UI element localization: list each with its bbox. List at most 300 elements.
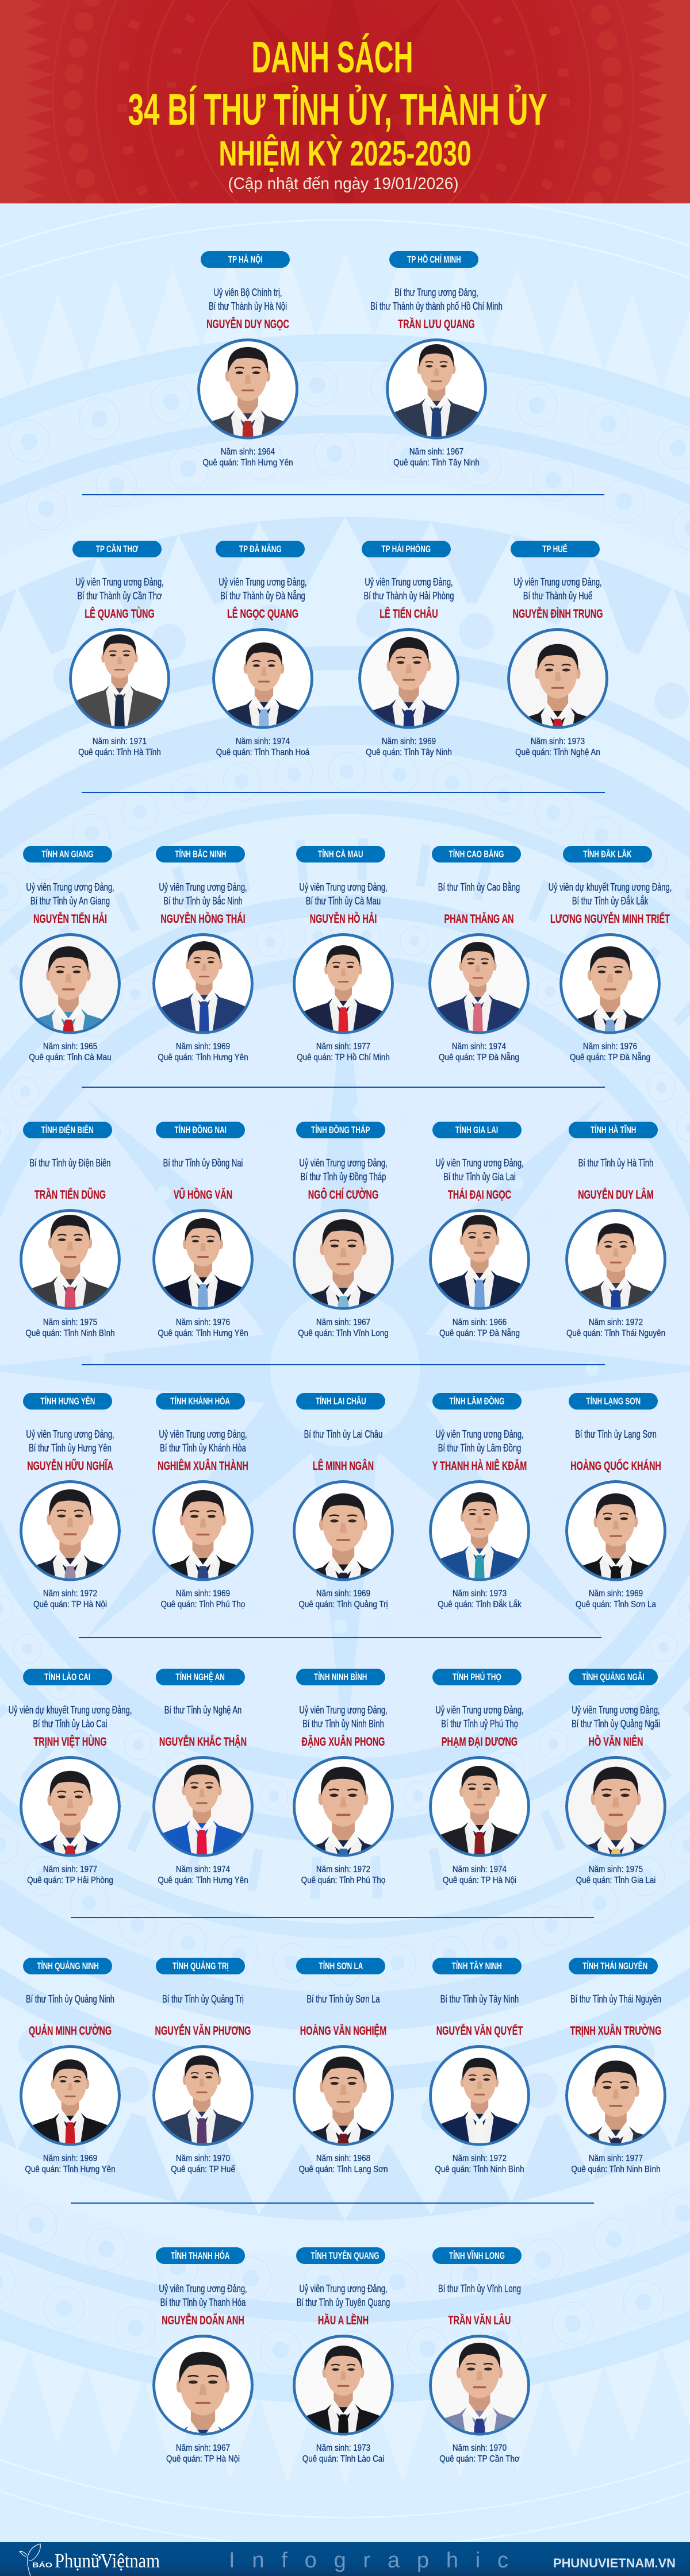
card: Tỉnh Lào Cai (7, 1669, 133, 1893)
province pill: TP HẢI PHÒNG (382, 544, 431, 555)
birth and hometown: Năm sinh: 1965 (43, 1042, 97, 1052)
province pill: TỈNH NGHỆ AN (176, 1672, 225, 1682)
portrait (152, 1756, 254, 1857)
card: Tỉnh Ninh Bình (280, 1669, 407, 1893)
role: Bí thư Tỉnh ủy Quảng Trị (162, 1993, 244, 2005)
province pill (569, 1122, 658, 1138)
role: Uỷ viên Trung ương Đảng, (26, 1428, 114, 1440)
role (364, 576, 454, 602)
province pill (23, 846, 112, 862)
logo wordmark: PhụnữViệtnam (55, 2550, 160, 2572)
name: NGHIÊM XUÂN THÀNH (158, 1460, 248, 1473)
birth and hometown: Năm sinh: 1971 (93, 737, 147, 746)
card: Tỉnh Thái Nguyên (553, 1958, 679, 2182)
portrait (386, 338, 487, 439)
province pill: TỈNH ĐỒNG THÁP (311, 1125, 370, 1135)
province pill: TỈNH LÀO CAI (45, 1672, 90, 1682)
name: ĐẶNG XUÂN PHONG (302, 1735, 385, 1749)
province pill: TỈNH LẠNG SƠN (586, 1396, 641, 1407)
province pill (362, 541, 451, 557)
birth and hometown: Năm sinh: 1974 (236, 737, 290, 746)
card: Tỉnh Đắk Lắk (549, 846, 672, 1062)
portrait (429, 1209, 530, 1310)
portrait (559, 933, 661, 1034)
birth and hometown (576, 1864, 656, 1886)
role (75, 576, 164, 602)
birth and hometown: Quê quán: Tỉnh Thanh Hoá (216, 748, 309, 757)
icon: logo flower (20, 2544, 40, 2576)
card: Tỉnh Tuyên Quang (280, 2247, 407, 2471)
name: HẦU A LỀNH (318, 2314, 369, 2327)
birth and hometown (515, 737, 600, 757)
portrait (565, 1209, 666, 1310)
portrait (152, 2334, 254, 2435)
birth and hometown (297, 1042, 390, 1062)
name: HOÀNG VĂN NGHIỆM (300, 2024, 386, 2038)
province pill (201, 251, 290, 268)
portrait (428, 933, 530, 1034)
birth and hometown: Quê quán: Tỉnh Hưng Yên (202, 458, 293, 468)
birth and hometown: Quê quán: Tỉnh Gia Lai (576, 1876, 656, 1885)
province pill: TỈNH PHÚ THỌ (453, 1672, 501, 1682)
role: Uỷ viên Trung ương Đảng, (26, 881, 114, 893)
birth and hometown: Năm sinh: 1968 (316, 2154, 370, 2163)
website: PHUNUVIETNAM.VN (553, 2556, 676, 2570)
birth and hometown: Năm sinh: 1969 (589, 1589, 643, 1599)
birth and hometown: Năm sinh: 1975 (43, 1318, 97, 1327)
name: Y THANH HÀ NIÊ KĐĂM (432, 1460, 527, 1473)
portrait (152, 1480, 254, 1581)
portrait (197, 338, 298, 439)
province pill: TỈNH AN GIANG (41, 849, 94, 860)
card: Tỉnh Lâm Đồng (416, 1393, 543, 1617)
role (9, 1703, 132, 1731)
birth and hometown: Năm sinh: 1972 (43, 1589, 97, 1599)
role (299, 1703, 388, 1731)
province pill (432, 846, 521, 862)
role: Bí thư Tỉnh ủy An Giang (30, 895, 110, 907)
card: Tỉnh Bắc Ninh (152, 846, 254, 1062)
role: Bí thư Tỉnh ủy Quảng Ninh (26, 1993, 114, 2005)
province pill: TP HỒ CHÍ MINH (407, 254, 461, 265)
role: Bí thư Tỉnh ủy Hà Tĩnh (578, 1157, 653, 1169)
card: TP Cần Thơ (69, 541, 170, 757)
birth and hometown: Năm sinh: 1973 (453, 1589, 507, 1599)
birth and hometown (25, 1317, 115, 1339)
birth and hometown: Năm sinh: 1970 (453, 2443, 507, 2453)
province pill: TỈNH QUẢNG NGÃI (582, 1672, 645, 1682)
title: DANH SÁCH (252, 32, 413, 82)
portrait (20, 1209, 121, 1310)
role: Bí thư Tỉnh ủy Đắk Lắk (572, 895, 648, 907)
province pill: TỈNH CÀ MAU (318, 849, 363, 860)
birth and hometown: Năm sinh: 1973 (531, 737, 585, 746)
card: Tỉnh An Giang (20, 846, 121, 1062)
card: Tỉnh Vĩnh Long (416, 2247, 543, 2471)
province pill: TỈNH THÁI NGUYÊN (582, 1961, 647, 1972)
province pill: TỈNH THANH HÓA (171, 2250, 230, 2261)
logo wordmark: BÁO (32, 2560, 52, 2569)
card: TP Hải Phòng (358, 541, 459, 757)
birth and hometown: Năm sinh: 1974 (452, 1042, 506, 1052)
name: NGUYỄN TIẾN HẢI (33, 912, 107, 926)
role (159, 1427, 247, 1455)
birth and hometown: Năm sinh: 1974 (453, 1865, 507, 1874)
role: Bí thư Tỉnh ủy Nghệ An (164, 1704, 241, 1716)
province pill (432, 1393, 522, 1410)
birth and hometown: Năm sinh: 1972 (453, 2154, 507, 2163)
province pill: TỈNH VĨNH LONG (449, 2250, 505, 2261)
province pill (389, 251, 478, 268)
province pill (563, 846, 652, 862)
role: Bí thư Tỉnh uỷ Phú Thọ (441, 1718, 518, 1730)
card: Tỉnh Nghệ An (140, 1669, 266, 1893)
province pill (216, 541, 305, 557)
birth and hometown (298, 1588, 388, 1610)
title: (Cập nhật đến ngày 19/01/2026) (228, 175, 459, 193)
role: Bí thư Tỉnh ủy Tây Ninh (440, 1993, 519, 2005)
role (513, 576, 602, 602)
province pill (511, 541, 600, 557)
birth and hometown: Quê quán: TP Hải Phòng (27, 1876, 113, 1885)
card: Tỉnh Lai Châu (280, 1393, 407, 1617)
portrait (429, 2334, 530, 2435)
name: VŨ HỒNG VĂN (174, 1188, 232, 1202)
province pill: TP CẦN THƠ (96, 544, 138, 555)
birth and hometown (571, 2153, 661, 2175)
birth and hometown: Quê quán: Tỉnh Hưng Yên (158, 1053, 248, 1062)
role: Uỷ viên Trung ương Đảng, (218, 576, 307, 588)
role: Bí thư Tỉnh ủy Cà Mau (306, 895, 381, 907)
role: Bí thư Tỉnh ủy Lạng Sơn (575, 1428, 657, 1440)
role: Bí thư Tỉnh ủy Lâm Đồng (438, 1442, 521, 1454)
role: Uỷ viên Trung ương Đảng, (299, 881, 388, 893)
role: Uỷ viên Trung ương Đảng, (159, 2283, 247, 2294)
birth and hometown: Năm sinh: 1969 (176, 1042, 230, 1052)
birth and hometown: Năm sinh: 1974 (176, 1865, 230, 1874)
birth and hometown: Năm sinh: 1967 (409, 447, 463, 457)
province pill (432, 1669, 522, 1685)
portrait (293, 1756, 394, 1857)
role: Bí thư Tỉnh ủy Gia Lai (443, 1171, 516, 1183)
birth and hometown (302, 2443, 384, 2465)
card: TP Đà Nẵng (212, 541, 313, 757)
birth and hometown (301, 1864, 385, 1886)
role: Uỷ viên Trung ương Đảng, (365, 576, 453, 588)
birth and hometown: Quê quán: TP Đà Nẵng (439, 1053, 519, 1062)
role (26, 881, 114, 907)
name: LÊ QUANG TÙNG (85, 607, 155, 621)
birth and hometown: Quê quán: Tỉnh Hưng Yên (158, 1876, 248, 1885)
portrait (152, 2044, 254, 2146)
card: Tỉnh Tây Ninh (416, 1958, 543, 2182)
birth and hometown: Năm sinh: 1977 (43, 1865, 97, 1874)
birth and hometown (158, 1317, 248, 1339)
role: Uỷ viên Trung ương Đảng, (75, 576, 164, 588)
birth and hometown (33, 1588, 107, 1610)
birth and hometown (202, 447, 293, 468)
birth and hometown: Năm sinh: 1973 (316, 2443, 370, 2453)
birth and hometown: Quê quán: Tỉnh Ninh Bình (25, 1329, 115, 1338)
role: Uỷ viên dự khuyết Trung ương Đảng, (549, 881, 672, 893)
province pill: TỈNH ĐỒNG NAI (174, 1125, 227, 1135)
birth and hometown: Quê quán: Tỉnh Hưng Yên (158, 1329, 248, 1338)
province pill: TỈNH ĐẮK LẮK (583, 849, 632, 860)
birth and hometown: Năm sinh: 1969 (316, 1589, 370, 1599)
role (370, 287, 503, 313)
role: Bí thư Tỉnh ủy Đồng Tháp (301, 1171, 386, 1183)
name: NGUYỄN ĐÌNH TRUNG (513, 607, 603, 621)
portrait (20, 1480, 121, 1581)
birth and hometown (158, 1042, 248, 1062)
birth and hometown: Năm sinh: 1967 (316, 1318, 370, 1327)
portrait (293, 1480, 394, 1581)
portrait (293, 1209, 394, 1310)
role (299, 881, 388, 907)
role: Uỷ viên Trung ương Đảng, (435, 1157, 524, 1169)
role: Uỷ viên Trung ương Đảng, (299, 1704, 388, 1716)
province pill (296, 1122, 385, 1138)
role: Uỷ viên Trung ương Đảng, (513, 576, 602, 588)
card: Tỉnh Điện Biên (20, 1122, 121, 1338)
birth and hometown (393, 447, 480, 468)
birth and hometown: Quê quán: Tỉnh Ninh Bình (435, 2165, 524, 2174)
birth and hometown: Năm sinh: 1964 (221, 447, 275, 457)
card: Tỉnh Quảng Ngãi (553, 1669, 679, 1893)
infographic label: Infographic (229, 2548, 508, 2573)
portrait (293, 2334, 394, 2435)
role: Bí thư Trung ương Đảng, (394, 287, 478, 298)
role: Bí thư Tỉnh ủy Cao Bằng (438, 881, 520, 893)
role (435, 1703, 524, 1731)
birth and hometown: Năm sinh: 1976 (176, 1318, 230, 1327)
card: Tỉnh Đồng Tháp (280, 1122, 407, 1346)
name: NGUYỄN VĂN QUYẾT (436, 2024, 523, 2038)
portrait (152, 1209, 254, 1310)
role: Bí thư Tỉnh ủy Hưng Yên (29, 1442, 112, 1454)
birth and hometown (78, 737, 161, 757)
birth and hometown (570, 1041, 650, 1063)
birth and hometown (298, 1317, 389, 1339)
name: TRẦN TIẾN DŨNG (34, 1188, 106, 1202)
role: Bí thư Tỉnh ủy Ninh Bình (302, 1718, 384, 1730)
name: NGUYỄN DUY LÂM (578, 1188, 654, 1202)
portrait (20, 933, 121, 1034)
birth and hometown: Năm sinh: 1976 (583, 1042, 637, 1052)
province pill (23, 1122, 112, 1138)
birth and hometown: Quê quán: Tỉnh Thái Nguyên (566, 1329, 665, 1338)
birth and hometown (443, 1864, 516, 1886)
province pill: TỈNH TUYÊN QUANG (310, 2250, 379, 2261)
name: TRỊNH VIỆT HÙNG (33, 1735, 107, 1749)
birth and hometown: Quê quán: TP Cần Thơ (439, 2454, 520, 2464)
birth and hometown: Năm sinh: 1969 (382, 737, 436, 746)
card: TP Huế (507, 541, 608, 757)
birth and hometown (438, 1588, 522, 1610)
card: Tỉnh Hà Tĩnh (553, 1122, 679, 1346)
birth and hometown (216, 737, 309, 757)
province pill (296, 846, 385, 862)
birth and hometown (158, 1864, 248, 1886)
name: HOÀNG QUỐC KHÁNH (570, 1460, 661, 1473)
birth and hometown (439, 1317, 520, 1339)
portrait (565, 1480, 666, 1581)
card: TP Hồ Chí Minh (370, 251, 503, 468)
province pill: TỈNH KHÁNH HÒA (171, 1396, 230, 1407)
portrait (565, 1756, 666, 1857)
portrait (20, 2044, 121, 2146)
province pill (296, 2247, 385, 2264)
birth and hometown: Năm sinh: 1970 (176, 2154, 230, 2163)
province pill: TỈNH HÀ TĨNH (591, 1125, 636, 1135)
role: Uỷ viên Trung ương Đảng, (159, 1428, 247, 1440)
birth and hometown: Năm sinh: 1969 (43, 2154, 97, 2163)
role: Bí thư Tỉnh ủy Sơn La (306, 1993, 380, 2005)
birth and hometown: Quê quán: Tỉnh Tây Ninh (393, 458, 480, 468)
portrait (429, 1480, 530, 1581)
role (209, 287, 287, 313)
role (159, 881, 247, 907)
role (26, 1427, 114, 1455)
birth and hometown: Quê quán: Tỉnh Nghệ An (515, 748, 600, 757)
portrait (507, 628, 608, 729)
card: Tỉnh Cao Bằng (428, 846, 530, 1062)
province pill (432, 1958, 522, 1974)
name: HỒ VĂN NIÊN (588, 1735, 643, 1749)
card: Tỉnh Sơn La (280, 1958, 407, 2182)
name: NGUYỄN HỮU NGHĨA (27, 1460, 113, 1473)
role: Bí thư Thành ủy Huế (523, 590, 592, 602)
portrait (565, 2044, 666, 2146)
card: TP Hà Nội (197, 251, 298, 468)
birth and hometown: Năm sinh: 1972 (316, 1865, 370, 1874)
name: TRẦN LƯU QUANG (398, 318, 475, 331)
birth and hometown: Năm sinh: 1966 (453, 1318, 507, 1327)
province pill (432, 2247, 522, 2264)
birth and hometown (29, 1042, 112, 1062)
province pill: TP ĐÀ NẴNG (239, 544, 281, 555)
province pill (296, 1958, 385, 1974)
role: Uỷ viên dự khuyết Trung ương Đảng, (9, 1704, 132, 1716)
birth and hometown: Quê quán: Tỉnh Hà Tĩnh (78, 748, 161, 757)
province pill (156, 2247, 245, 2264)
province pill: TP HÀ NỘI (228, 254, 262, 265)
birth and hometown (576, 1588, 656, 1610)
birth and hometown: Quê quán: Tỉnh Quảng Trị (298, 1600, 388, 1609)
province pill (23, 1393, 112, 1410)
card: Tỉnh Gia Lai (416, 1122, 543, 1346)
card: Tỉnh Quảng Ninh (7, 1958, 133, 2182)
province pill (72, 541, 162, 557)
province pill (296, 1669, 385, 1685)
birth and hometown: Quê quán: Tỉnh Phú Thọ (301, 1876, 385, 1885)
birth and hometown: Quê quán: Tỉnh Phú Thọ (161, 1600, 245, 1609)
birth and hometown (166, 2443, 240, 2465)
birth and hometown (435, 2153, 524, 2175)
title: NHIỆM KỲ 2025-2030 (218, 134, 471, 173)
birth and hometown: Năm sinh: 1967 (176, 2443, 230, 2453)
name: THÁI ĐẠI NGỌC (448, 1188, 511, 1202)
role: Bí thư Tỉnh ủy Vĩnh Long (438, 2283, 521, 2294)
role (435, 1156, 524, 1184)
portrait (429, 1756, 530, 1857)
province pill: TỈNH TÂY NINH (452, 1961, 502, 1972)
role: Bí thư Tỉnh ủy Bắc Ninh (163, 895, 243, 907)
role: Bí thư Tỉnh ủy Lào Cai (33, 1718, 108, 1730)
province pill (23, 1958, 112, 1974)
name: QUẢN MINH CƯỜNG (29, 2024, 112, 2038)
birth and hometown (439, 1042, 519, 1062)
birth and hometown (27, 1864, 113, 1886)
province pill (156, 1122, 245, 1138)
name: PHẠM ĐẠI DƯƠNG (442, 1735, 518, 1749)
province pill (569, 1669, 658, 1685)
role (159, 2282, 247, 2309)
role: Uỷ viên Trung ương Đảng, (572, 1704, 660, 1716)
portrait (20, 1756, 121, 1857)
birth and hometown: Năm sinh: 1977 (316, 1042, 370, 1052)
birth and hometown: Quê quán: Tỉnh Vĩnh Long (298, 1329, 389, 1338)
card: Tỉnh Đồng Nai (140, 1122, 266, 1346)
province pill: TỈNH ĐIỆN BIÊN (41, 1125, 94, 1135)
role: Bí thư Thành ủy Đà Nẵng (220, 590, 305, 602)
card: Tỉnh Lạng Sơn (553, 1393, 679, 1617)
province pill: TỈNH LÂM ĐỒNG (450, 1396, 504, 1407)
birth and hometown: Quê quán: Tỉnh Lào Cai (302, 2454, 384, 2464)
birth and hometown: Quê quán: Tỉnh Ninh Bình (571, 2165, 661, 2174)
card: Tỉnh Hưng Yên (7, 1393, 133, 1617)
birth and hometown: Quê quán: TP Hà Nội (443, 1876, 516, 1885)
birth and hometown: Quê quán: Tỉnh Tây Ninh (366, 748, 452, 757)
portrait (429, 2044, 530, 2146)
name: NGUYỄN DOÃN ANH (162, 2314, 244, 2327)
province pill: TỈNH QUẢNG NINH (37, 1961, 98, 1972)
province pill: TỈNH CAO BẰNG (449, 849, 504, 860)
province pill (432, 1122, 522, 1138)
card: Tỉnh Cà Mau (293, 846, 394, 1062)
name: LÊ NGỌC QUANG (227, 607, 298, 621)
name: TRỊNH XUÂN TRƯỜNG (570, 2024, 661, 2038)
birth and hometown: Quê quán: Tỉnh Hưng Yên (25, 2165, 116, 2174)
role (299, 1156, 388, 1184)
card: Tỉnh Khánh Hòa (140, 1393, 266, 1617)
name: NGUYỄN DUY NGỌC (206, 318, 289, 331)
name: NGÔ CHÍ CƯỜNG (308, 1188, 378, 1202)
birth and hometown (566, 1317, 665, 1339)
role: Bí thư Tỉnh ủy Tuyên Quang (297, 2297, 390, 2308)
role: Bí thư Tỉnh ủy Thanh Hóa (160, 2297, 246, 2308)
name: NGUYỄN VĂN PHƯƠNG (155, 2024, 251, 2038)
birth and hometown (171, 2153, 235, 2175)
province pill: TỈNH NINH BÌNH (314, 1672, 367, 1682)
province pill (569, 1958, 658, 1974)
name: LÊ MINH NGÂN (313, 1460, 374, 1473)
birth and hometown: Quê quán: Tỉnh Lạng Sơn (298, 2165, 388, 2174)
role: Uỷ viên Trung ương Đảng, (299, 1157, 388, 1169)
role: Bí thư Thành ủy Cần Thơ (77, 590, 162, 602)
birth and hometown (366, 737, 452, 757)
birth and hometown (25, 2153, 116, 2175)
header banner (0, 0, 690, 203)
province pill: TỈNH HƯNG YÊN (40, 1396, 95, 1407)
province pill (296, 1393, 385, 1410)
birth and hometown: Quê quán: TP Hà Nội (33, 1600, 107, 1609)
role: Bí thư Tỉnh ủy Thái Nguyên (570, 1993, 661, 2005)
birth and hometown: Quê quán: Tỉnh Đắk Lắk (438, 1600, 522, 1609)
role (435, 1427, 524, 1455)
role: Bí thư Tỉnh ủy Khánh Hòa (160, 1442, 246, 1454)
province pill (23, 1669, 112, 1685)
